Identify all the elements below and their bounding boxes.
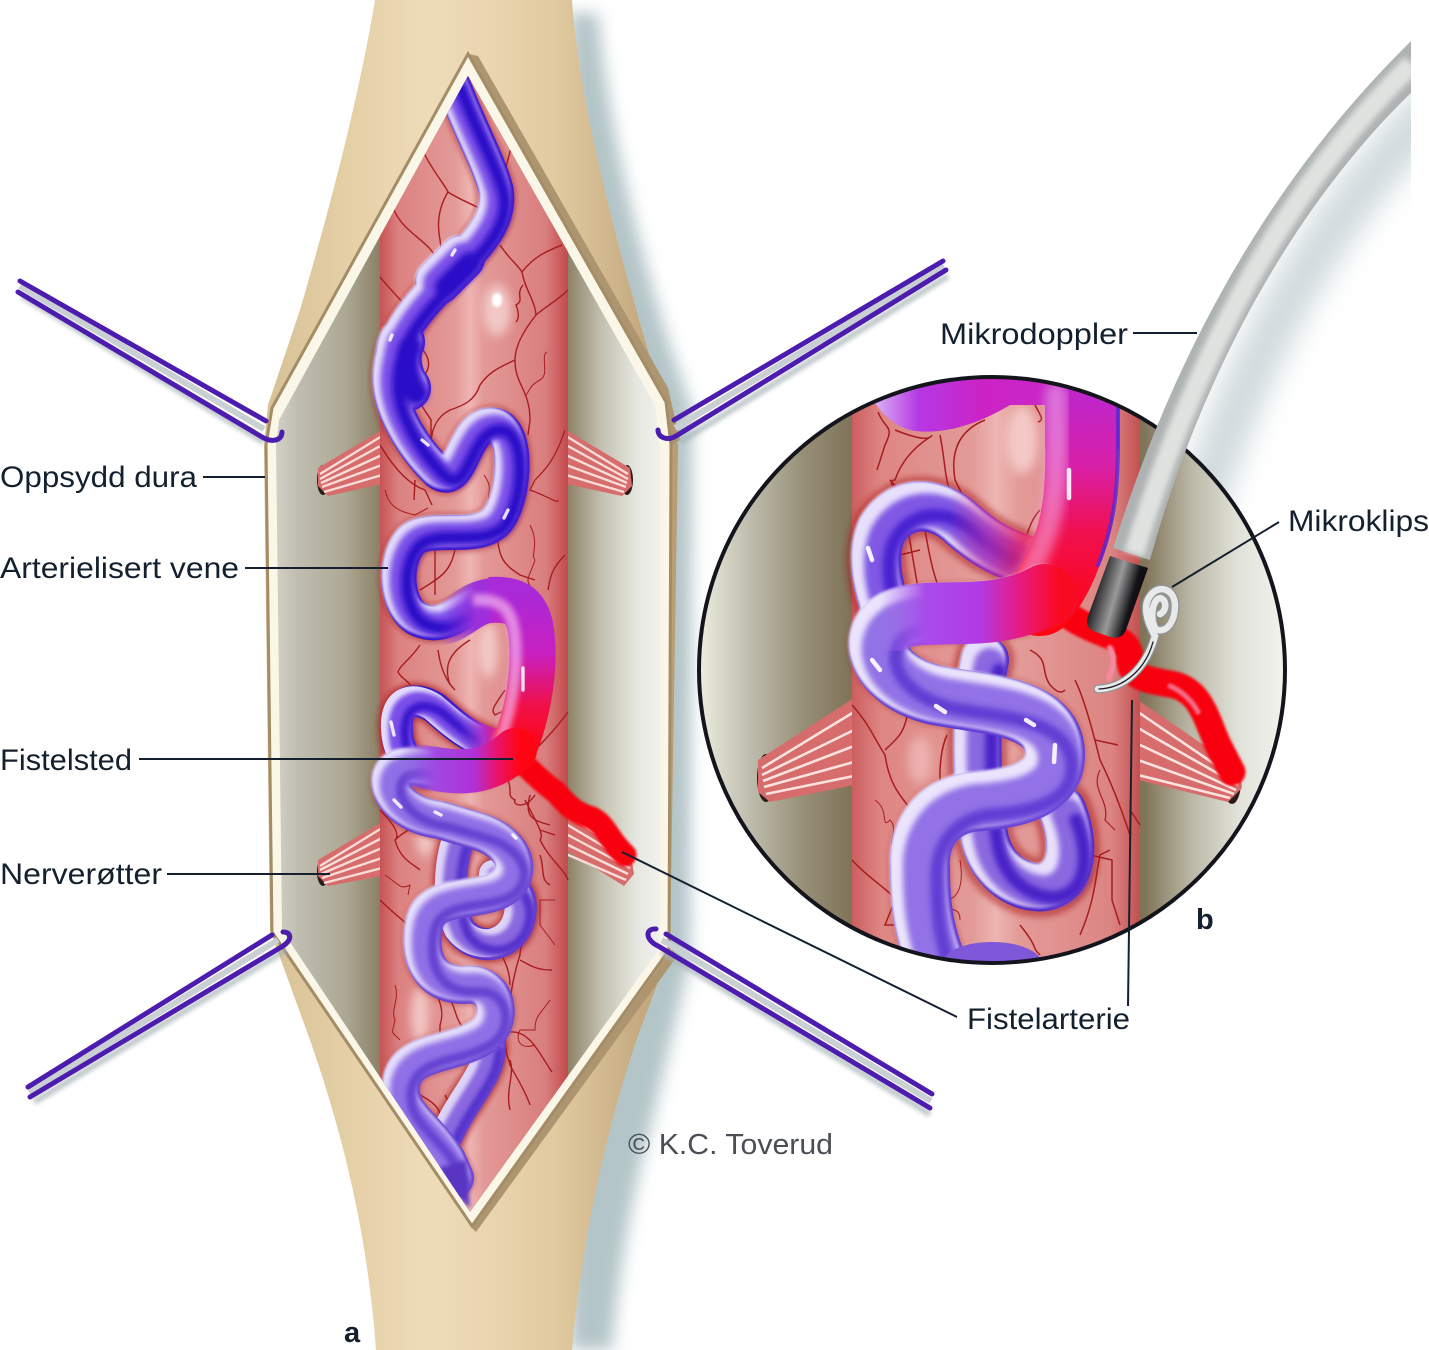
branch vein <box>395 700 520 777</box>
spinal cord and vein <box>380 50 625 1230</box>
blood colour overlay b <box>895 595 1045 620</box>
suture lower right <box>648 929 932 1108</box>
red artery trunk <box>505 745 625 855</box>
magenta vein segments <box>430 600 533 745</box>
circle outline <box>699 377 1285 963</box>
panel letter b: b <box>1196 904 1214 936</box>
suture upper left <box>18 281 282 440</box>
nerve roots lower right <box>566 806 634 886</box>
vein shadow b <box>876 506 1070 985</box>
blood colour overlay on fistula <box>400 750 515 771</box>
label: Fistelsted: Fistelsted <box>0 744 132 777</box>
small surface vessels <box>380 148 568 1170</box>
microdoppler probe <box>1087 40 1412 638</box>
circle floor <box>699 377 1285 963</box>
panel b: magnified detail circle <box>699 370 1285 998</box>
label: Nerverøtter: Nerverøtter <box>0 858 162 891</box>
cord b <box>852 370 1140 970</box>
dura body <box>264 0 678 1350</box>
label: Mikrodoppler: Mikrodoppler <box>940 318 1128 351</box>
copyright: © K.C. Toverud <box>628 1129 833 1161</box>
vessels b <box>852 405 1140 955</box>
white spot on cord <box>492 293 502 307</box>
nerve roots b right <box>1138 700 1242 804</box>
cord b highlights <box>908 406 1038 784</box>
nerve roots upper left <box>317 430 382 496</box>
microdoppler shadow <box>1186 93 1411 507</box>
bottom vein piece <box>942 942 1042 986</box>
panel a: dura and spinal cord <box>264 0 680 1350</box>
rear vein coils <box>445 824 530 1140</box>
label: Mikroklips: Mikroklips <box>1288 505 1429 538</box>
dura opening floor <box>276 76 660 1212</box>
label: Fistelarterie: Fistelarterie <box>967 1003 1130 1036</box>
vein tail <box>438 1160 470 1208</box>
dura rim <box>266 54 671 1226</box>
lower vein lilac <box>388 748 525 1208</box>
label: Arterielisert vene: Arterielisert vene <box>0 552 239 585</box>
dura darker fold <box>468 54 680 1232</box>
microclip <box>1098 589 1175 689</box>
label lines <box>139 333 1279 1017</box>
suture shadows <box>22 276 948 1114</box>
sutures <box>18 261 948 1114</box>
top magenta arch <box>870 370 1119 450</box>
probe tip <box>1087 556 1148 638</box>
probe shaft <box>1113 40 1412 560</box>
artery b <box>1050 600 1232 772</box>
branch vein b <box>874 504 1053 629</box>
dura shadow <box>570 12 692 1350</box>
suture upper right <box>658 261 946 438</box>
suture gaps <box>20 266 944 1101</box>
suture threads <box>18 261 946 1108</box>
panel letter a: a <box>344 1317 361 1349</box>
nerve roots lower left <box>317 822 382 886</box>
label: Oppsydd dura: Oppsydd dura <box>0 461 197 494</box>
rear vein coil b <box>976 658 1084 897</box>
spinal cord <box>380 50 568 1230</box>
nerve roots upper right <box>566 430 633 496</box>
highlights on cord <box>411 284 511 1043</box>
right arterialised vein b <box>1015 394 1118 600</box>
nerve roots b left <box>757 698 854 802</box>
front vein b <box>877 593 1072 998</box>
vein highlights b <box>868 470 1069 762</box>
suture lower left <box>28 932 290 1097</box>
highlights on vein <box>390 250 523 838</box>
upper vein blue <box>388 80 520 628</box>
vein shadow on cord <box>390 82 533 1178</box>
